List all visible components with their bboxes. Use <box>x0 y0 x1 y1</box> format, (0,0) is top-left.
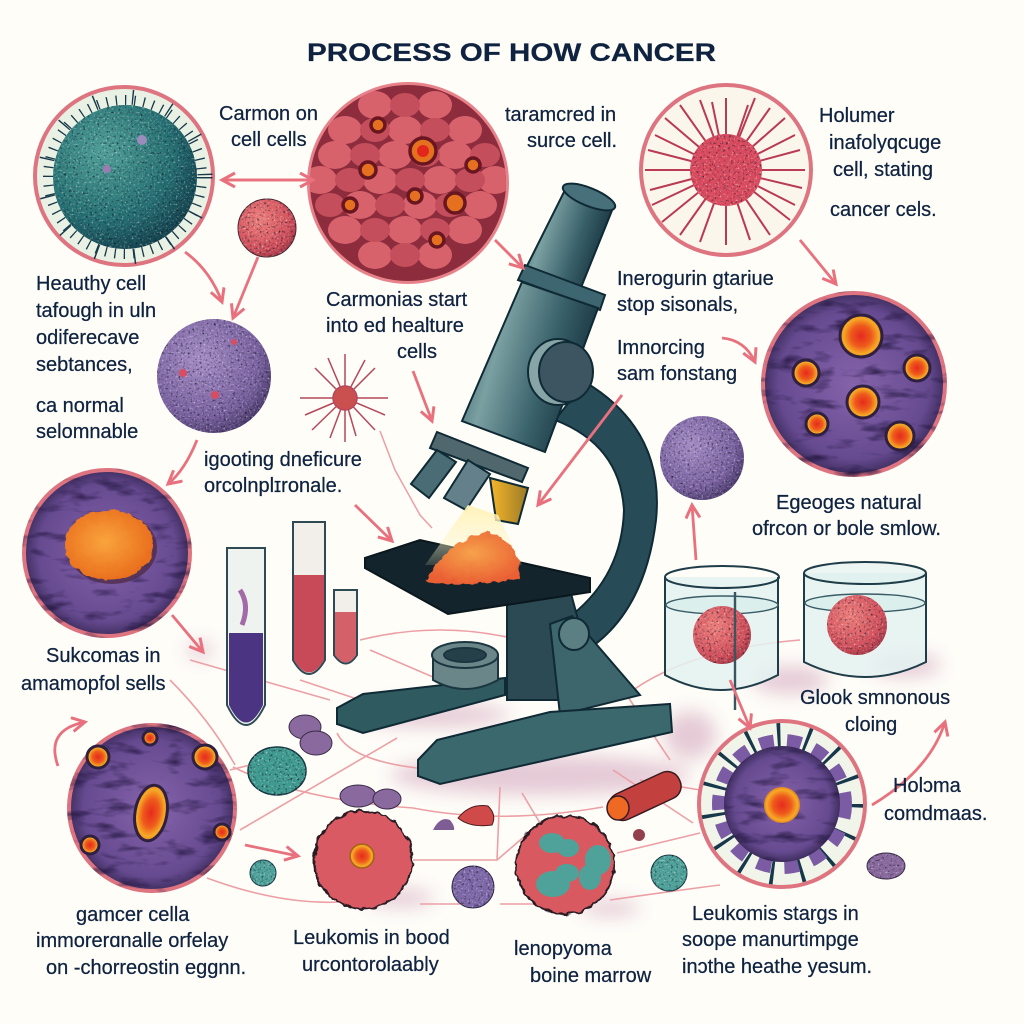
text: common on cell <box>219 103 318 151</box>
icon: small red cell <box>238 199 296 257</box>
text: leukemia starts <box>682 903 872 978</box>
capsule <box>605 767 685 825</box>
arrows <box>55 180 945 856</box>
text: sarcomas: amamopfol sells <box>21 673 166 695</box>
text: lymphomas: Holɔma <box>893 775 962 797</box>
microscope lower tube <box>462 282 598 452</box>
text: top right: Holumer <box>819 105 895 127</box>
text: ignoring <box>204 449 362 497</box>
text: evades: Egeoges natural <box>776 492 922 514</box>
text: signals: stop sisonals, <box>617 294 738 316</box>
text: tumour source: surce cell. <box>527 130 617 152</box>
text: cloning: cloing <box>845 714 897 736</box>
test tubes <box>227 522 357 725</box>
title: PROCESS OF HOW CANCER <box>307 39 716 67</box>
text: healthy cell: Heauthy cell <box>36 273 146 295</box>
text: signals <box>617 268 774 316</box>
text: common on cell: Carmon on <box>219 103 318 125</box>
text: leukemia starts: inɔthe heathe yesum. <box>682 956 872 978</box>
text: healthy cell: tafough in uln <box>36 300 156 322</box>
small dot <box>633 829 645 841</box>
red cell with nucleus <box>314 811 412 909</box>
text: leukemia starts: Leukomis stargs in <box>692 903 859 925</box>
floor network lines <box>170 630 800 904</box>
microscope nosepiece <box>430 432 528 482</box>
bottom cells <box>248 715 905 914</box>
icon: purple small cell <box>660 416 744 500</box>
beaker left <box>665 566 779 710</box>
text: immorcing: Imnorcing <box>617 337 705 359</box>
icon: purple cell with nuclei right <box>763 293 945 475</box>
text: cancer cells: on -chorreostin eggnn. <box>46 957 246 979</box>
rock: purple small <box>340 785 401 809</box>
text: lymphomas: comdmaas. <box>884 803 987 825</box>
text: sarcomas: Sukcomas in <box>46 645 160 667</box>
microscope condenser <box>432 642 498 689</box>
icon: red cancer cell <box>303 82 512 284</box>
microscope upper tube <box>522 190 613 290</box>
microscope head knob <box>528 339 593 405</box>
text: leukemia starts: soope manurtimpge <box>682 929 859 951</box>
microscope collar <box>518 265 605 310</box>
icon: purple cell with orange tumour <box>24 470 190 636</box>
text: cloning <box>800 687 950 736</box>
microscope column <box>507 590 600 700</box>
icon: purple cell with branching membrane <box>699 721 865 887</box>
text: tumour source: taramcred in <box>505 104 616 126</box>
tube: red tall <box>293 522 325 674</box>
microscope arm <box>555 382 657 648</box>
light beam <box>425 505 522 565</box>
icon: purple round cell <box>157 319 271 433</box>
text: top right: inafolyqcuge <box>829 132 941 154</box>
text: sarcomas <box>21 645 166 695</box>
small cell: pink <box>433 819 454 830</box>
small cell: teal right <box>651 855 687 891</box>
rock: teal <box>248 747 306 795</box>
text: carcinomas: into ed healture <box>326 315 464 337</box>
text: evades: ofrcon or bole smlow. <box>752 518 941 540</box>
text: bone marrow: lenopyoma <box>514 938 613 960</box>
text: immorcing: sam fonstang <box>617 363 737 385</box>
microscope pillar <box>550 616 640 715</box>
text: leukemia blood: urcontorolaably <box>302 954 439 976</box>
text: carcinomas: Carmonias start <box>326 289 468 311</box>
text: common on cell: cell cells <box>231 129 307 151</box>
text: healthy cell: odiferecave <box>36 327 139 349</box>
text: ignoring: orcolnplɪronale. <box>204 475 342 497</box>
text: bone marrow: boine marrow <box>530 965 652 987</box>
text: healthy cell: sebtances, <box>36 354 133 376</box>
text: cancer cells: gamcer cella <box>76 904 190 926</box>
text: lymphomas <box>884 775 987 825</box>
text: top right: cancer cels. <box>830 199 937 221</box>
text: bone marrow <box>514 938 652 987</box>
text: cancer cells <box>36 904 246 979</box>
text: healthy cell: ca normal <box>36 395 124 417</box>
microscope focus knob <box>559 618 589 650</box>
icon: purple cell with oval nucleus <box>69 725 235 891</box>
icon: spiky red cell in circle <box>641 85 811 255</box>
text: carcinomas <box>326 289 468 363</box>
small cell: purple <box>452 866 494 908</box>
text: leukemia blood <box>293 927 450 976</box>
text: healthy cell: selomnable <box>36 421 138 443</box>
text: signals: Inerogurin gtariue <box>617 268 774 290</box>
text: top right <box>819 105 941 221</box>
icon: small spiky cell <box>300 354 432 528</box>
text: carcinomas: cells <box>397 341 437 363</box>
microscope objectives <box>411 450 528 524</box>
small cell: red <box>458 806 494 826</box>
text: cancer cells: immorerɑnalle orfelay <box>36 930 228 952</box>
tube: purple <box>227 548 265 725</box>
microscope eyepiece <box>560 178 618 216</box>
small cell: purple right <box>867 853 905 879</box>
text: tumour source <box>505 104 617 152</box>
text: immorcing <box>617 337 737 385</box>
microscope <box>337 178 672 784</box>
icon: teal healthy cell <box>35 87 213 265</box>
microscope stage <box>365 540 590 614</box>
rock: purple pair <box>289 715 332 755</box>
tube: red small <box>334 590 357 664</box>
text: top right: cell, stating <box>833 159 933 181</box>
text: leukemia blood: Leukomis in bood <box>293 927 450 949</box>
text: evades <box>752 492 941 540</box>
tumour sample <box>425 532 520 584</box>
text: cloning: Glook smnonous <box>800 687 950 709</box>
floor shadows <box>186 642 941 916</box>
mixed red and teal cell <box>516 816 614 914</box>
small cell: teal <box>250 860 276 886</box>
text: ignoring: igooting dneficure <box>204 449 362 471</box>
beaker right <box>804 562 926 677</box>
microscope right foot <box>418 704 672 784</box>
microscope left foot <box>337 678 505 733</box>
text: healthy cell <box>36 273 156 443</box>
